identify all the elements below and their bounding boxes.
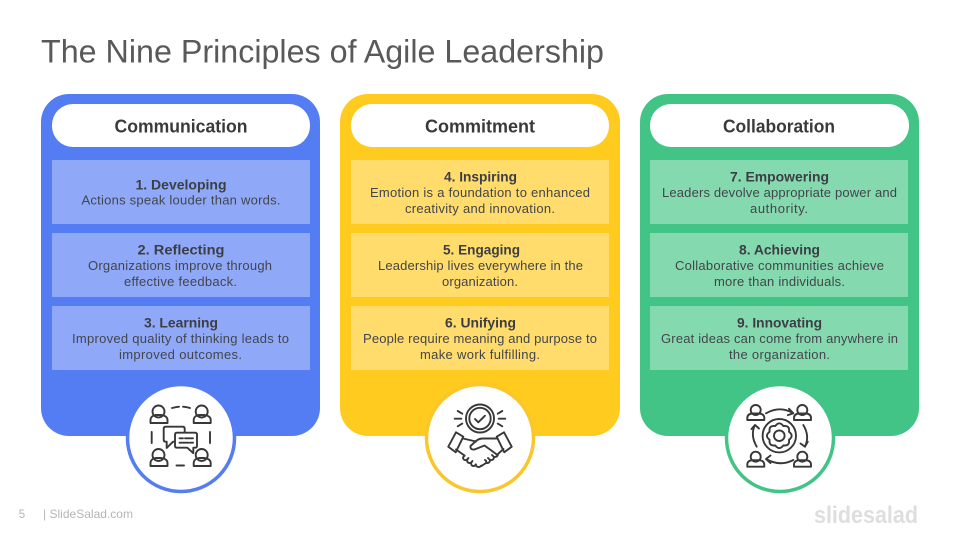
- item 9 innovating: Great ideas can come from anywhere in: [661, 331, 898, 346]
- item 2 reflecting: 2. Reflecting: [138, 242, 224, 258]
- item 6 unifying: [351, 306, 609, 370]
- item 3 learning: [52, 306, 310, 370]
- item 1 developing: [52, 160, 310, 224]
- heading: collaboration: [650, 104, 909, 147]
- item 7 empowering: authority.: [750, 201, 808, 216]
- panel: communication: [41, 94, 320, 492]
- heading: commitment: Commitment: [425, 116, 535, 136]
- item 3 learning: improved outcomes.: [119, 347, 242, 362]
- icon: handshake with check badge: [426, 384, 534, 492]
- item 7 empowering: 7. Empowering: [730, 170, 829, 186]
- item 7 empowering: Leaders devolve appropriate power and: [662, 185, 897, 200]
- item 3 learning: Improved quality of thinking leads to: [72, 331, 289, 346]
- item 4 inspiring: [351, 160, 609, 224]
- title: The Nine Principles of Agile Leadership: [41, 34, 604, 70]
- item 5 engaging: [351, 233, 609, 297]
- item 8 achieving: 8. Achieving: [739, 242, 820, 258]
- item 1 developing: Actions speak louder than words.: [82, 192, 280, 208]
- item 6 unifying: make work fulfilling.: [420, 347, 540, 362]
- heading: communication: [52, 104, 310, 147]
- item 4 inspiring: Emotion is a foundation to enhanced: [370, 185, 590, 200]
- item 8 achieving: more than individuals.: [714, 274, 845, 289]
- heading: commitment: [351, 104, 609, 147]
- item 8 achieving: [650, 233, 908, 297]
- item 6 unifying: 6. Unifying: [445, 315, 516, 331]
- item 9 innovating: [650, 306, 908, 370]
- icon: people around gear: [726, 384, 834, 492]
- item 5 engaging: organization.: [442, 274, 518, 289]
- icon: team communication: [128, 384, 234, 492]
- item 9 innovating: 9. Innovating: [737, 315, 822, 331]
- item 2 reflecting: [52, 233, 310, 297]
- item 4 inspiring: 4. Inspiring: [444, 170, 517, 186]
- item 1 developing: 1. Developing: [136, 177, 226, 193]
- item 6 unifying: People require meaning and purpose to: [363, 331, 597, 346]
- item 7 empowering: [650, 160, 908, 224]
- item 5 engaging: 5. Engaging: [443, 242, 520, 258]
- panel: collaboration: [640, 94, 919, 492]
- heading: collaboration: Collaboration: [723, 116, 835, 136]
- item 2 reflecting: effective feedback.: [124, 274, 237, 289]
- item 5 engaging: Leadership lives everywhere in the: [378, 258, 583, 273]
- footer source: | SlideSalad.com: [43, 507, 133, 521]
- item 4 inspiring: creativity and innovation.: [405, 201, 555, 216]
- item 2 reflecting: Organizations improve through: [88, 258, 272, 273]
- item 9 innovating: the organization.: [729, 347, 830, 362]
- heading: communication: Communication: [114, 116, 248, 136]
- item 8 achieving: Collaborative communities achieve: [675, 258, 884, 273]
- logo: slidesalad: slidesalad: [814, 502, 918, 529]
- panel: commitment: [340, 94, 620, 492]
- page number: 5: [19, 509, 25, 521]
- item 3 learning: 3. Learning: [144, 315, 218, 331]
